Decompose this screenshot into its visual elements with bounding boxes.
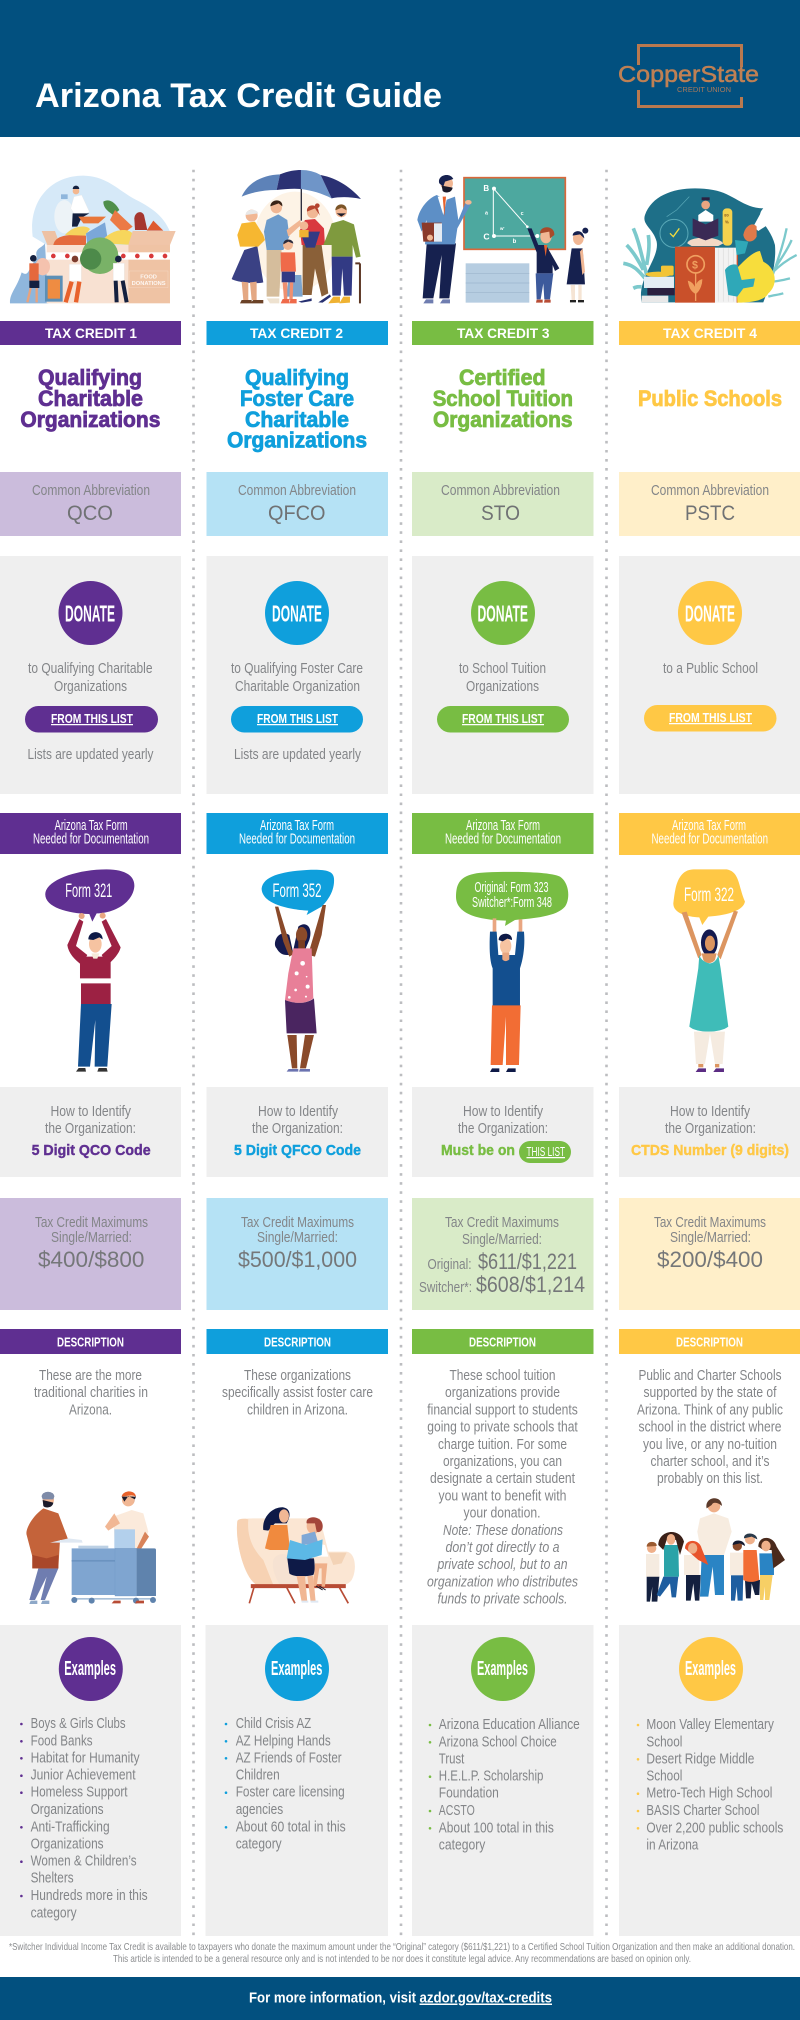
banner: tax form needed: Needed for Documentation [239, 832, 355, 848]
how to identify panel [206, 1087, 388, 1177]
examples list: Desert Ridge Middle [646, 1750, 754, 1767]
examples list: Organizations [31, 1801, 104, 1818]
footer band: azdor.gov/tax-credits [420, 1990, 552, 2006]
banner: tax credit 1 [0, 321, 181, 345]
examples list: About 100 total in this [439, 1819, 554, 1836]
heading: certified school tuition organizations: Certified [459, 365, 546, 390]
donate circle [58, 581, 122, 645]
donate panel: Charitable Organization [235, 678, 360, 695]
person with speech bubble: form 321 [45, 869, 134, 1072]
banner: tax form needed: Arizona Tax Form [466, 818, 540, 834]
donate panel: to Qualifying Foster Care [231, 660, 363, 677]
examples list: Hundreds more in this [31, 1887, 148, 1904]
logo: CopperState Credit Union [618, 46, 759, 106]
how to identify panel: Must be on [441, 1142, 515, 1159]
examples list: agencies [236, 1801, 283, 1818]
heading: qualifying foster care charitable organizations: Foster Care [240, 386, 354, 411]
examples list: H.E.L.P. Scholarship [439, 1768, 543, 1785]
banner: tax form needed [0, 813, 181, 854]
examples list: BASIS Charter School [646, 1802, 759, 1819]
examples list: category [236, 1835, 282, 1852]
illustration: teacher at chalkboard with students: w' [499, 226, 504, 231]
banner: tax form needed: Arizona Tax Form [672, 818, 746, 834]
illustration: teacher at chalkboard with students: C [483, 231, 490, 241]
banner: tax form needed: Arizona Tax Form [260, 818, 334, 834]
donate panel [206, 556, 388, 794]
donate panel: to a Public School [663, 660, 758, 677]
donate circle [471, 581, 535, 645]
how to identify panel [619, 1087, 800, 1177]
common abbreviation box [0, 472, 181, 536]
banner: tax form needed: Arizona Tax Form [55, 818, 128, 834]
banner: tax credit 2: TAX CREDIT 2 [250, 325, 343, 341]
heading: qualifying foster care charitable organizations: Qualifying [245, 365, 349, 390]
examples list: School [646, 1733, 682, 1750]
tax credit maximums box: $611/$1,221 [478, 1249, 577, 1274]
illustration: student on book with piggy bank: 80 [724, 213, 730, 218]
illustration: food donations box [10, 176, 176, 303]
examples list: Food Banks [31, 1732, 93, 1749]
description text: designate a certain student [430, 1470, 576, 1487]
description text: These are the more [39, 1367, 142, 1384]
how to identify panel: 5 Digit QFCO Code [234, 1142, 361, 1159]
how to identify panel: How to Identify [258, 1103, 338, 1120]
tax credit maximums box: Tax Credit Maximums [445, 1214, 559, 1231]
common abbreviation box: Common Abbreviation [441, 482, 560, 499]
illustration: student on book with piggy bank: % [725, 219, 729, 224]
banner: tax form needed: Needed for Documentation [445, 832, 561, 848]
heading: qualifying foster care charitable organizations [227, 365, 367, 452]
common abbreviation box: Common Abbreviation [651, 482, 769, 499]
description text: organizations, you can [443, 1453, 562, 1470]
donate circle: DONATE [478, 600, 528, 626]
description text: charge tuition. For some [438, 1436, 567, 1453]
pill button: from this list: FROM THIS LIST [51, 712, 133, 726]
person with speech bubble: form 352: Form 352 [272, 881, 322, 902]
examples list [429, 1716, 580, 1853]
person with speech bubble: form 322 [673, 869, 745, 1072]
description text: organizations provide [445, 1384, 560, 1401]
pill button: from this list: FROM THIS LIST [462, 712, 544, 726]
description text [34, 1367, 148, 1418]
examples list: About 60 total in this [236, 1818, 346, 1835]
banner: tax credit 3: TAX CREDIT 3 [457, 325, 550, 341]
panel: column 2 qualifying foster care charitable organizations [206, 170, 388, 1936]
person with speech bubble: form 323 and 348: Original: Form 323 [474, 880, 548, 896]
donate panel: Lists are updated yearly [28, 746, 154, 763]
banner: tax form needed [619, 813, 800, 855]
tax credit maximums box: Single/Married: [670, 1229, 751, 1246]
pill button: from this list [437, 706, 569, 732]
examples list: Organizations [31, 1835, 104, 1852]
description text [637, 1367, 783, 1487]
tax credit maximums box: $500/$1,000 [238, 1247, 357, 1272]
examples list: category [439, 1836, 486, 1853]
common abbreviation box [206, 472, 388, 536]
heading: qualifying foster care charitable organizations: Organizations [227, 428, 367, 452]
examples list: ACSTO [439, 1802, 475, 1819]
banner: tax credit 1: TAX CREDIT 1 [45, 325, 137, 341]
illustration: teacher at chalkboard with students: a [485, 210, 488, 216]
heading: qualifying charitable organizations [20, 365, 160, 432]
how to identify panel: the Organization: [458, 1120, 548, 1137]
illustration: teacher at chalkboard with students: b [513, 239, 517, 245]
banner: tax credit 4 [619, 321, 800, 345]
tax credit maximums box: $200/$400 [657, 1247, 763, 1272]
examples circle [471, 1637, 535, 1701]
pill: this list [519, 1141, 571, 1163]
description text: financial support to students [427, 1401, 578, 1418]
person with speech bubble: form 321: Form 321 [65, 881, 112, 902]
banner: description: DESCRIPTION [469, 1334, 536, 1350]
tax credit maximums box [0, 1198, 181, 1310]
illustration: woman reading to child in armchair [237, 1507, 355, 1603]
banner: tax credit 3 [412, 321, 594, 345]
donate circle: DONATE [685, 600, 735, 626]
examples list: Trust [439, 1750, 465, 1767]
how to identify panel: How to Identify [463, 1103, 543, 1120]
common abbreviation box: QFCO [268, 502, 326, 525]
illustration: meal server and man [26, 1491, 156, 1604]
how to identify panel: How to Identify [670, 1103, 750, 1120]
pill button: from this list: FROM THIS LIST [257, 712, 338, 726]
how to identify panel: CTDS Number (9 digits) [631, 1142, 789, 1159]
examples list [20, 1715, 148, 1922]
common abbreviation box [412, 472, 594, 536]
illustration: teacher at chalkboard with students [417, 175, 588, 303]
panel: column 4 public schools [619, 188, 800, 1936]
donate panel [0, 556, 181, 794]
banner: tax form needed: Needed for Documentation [33, 832, 149, 848]
illustration: food donations box: DONATIONS [132, 281, 166, 287]
examples list: Arizona Education Alliance [439, 1716, 580, 1733]
illustration: teacher at chalkboard with students: B [483, 184, 489, 193]
common abbreviation box [619, 472, 800, 536]
panel: column 1 qualifying charitable organizations [0, 176, 181, 1936]
examples list [637, 1716, 783, 1853]
pill button: from this list: FROM THIS LIST [669, 711, 752, 725]
description text: charter school, and it’s [650, 1453, 770, 1470]
common abbreviation box: QCO [67, 502, 113, 525]
examples list: in Arizona [646, 1836, 699, 1853]
examples list: Shelters [31, 1870, 74, 1887]
tax credit maximums box: Single/Married: [462, 1231, 542, 1248]
heading: qualifying charitable organizations: Organizations [20, 407, 160, 432]
banner: tax credit 2 [206, 321, 388, 345]
tax credit maximums box: Single/Married: [257, 1229, 338, 1246]
donate panel [619, 556, 800, 794]
description text [427, 1367, 578, 1608]
illustration: teacher at chalkboard with students: c [521, 211, 524, 217]
description text: Note: These donations [443, 1522, 563, 1539]
heading: qualifying charitable organizations: Charitable [38, 386, 143, 411]
description text: don’t got directly to a [446, 1539, 560, 1556]
examples list: Women & Children’s [31, 1853, 137, 1870]
description text: traditional charities in [34, 1384, 148, 1401]
description text: funds to private schools. [438, 1591, 568, 1608]
description text: probably on this list. [657, 1470, 763, 1487]
examples list: Boys & Girls Clubs [31, 1715, 126, 1732]
heading: public schools: Public Schools [638, 386, 782, 411]
examples panel [619, 1625, 800, 1936]
header band [0, 0, 800, 137]
tax credit maximums box: Tax Credit Maximums [35, 1214, 148, 1231]
donate circle: DONATE [272, 600, 322, 626]
how to identify panel: 5 Digit QCO Code [32, 1142, 151, 1159]
banner: description: DESCRIPTION [57, 1334, 124, 1350]
person with speech bubble: form 352 [262, 870, 334, 1072]
examples list: AZ Helping Hands [236, 1732, 331, 1749]
donate panel: to School Tuition [459, 660, 546, 677]
examples panel [206, 1625, 388, 1936]
examples circle: Examples [271, 1658, 322, 1680]
banner: description [619, 1329, 800, 1354]
heading: certified school tuition organizations: Organizations [433, 407, 572, 432]
examples panel [0, 1625, 181, 1936]
banner: description [412, 1329, 594, 1354]
banner: description: DESCRIPTION [264, 1334, 331, 1350]
tax credit maximums box: Switcher*: [419, 1279, 472, 1296]
donate panel [412, 556, 594, 794]
tax credit maximums box: Tax Credit Maximums [241, 1214, 354, 1231]
examples list: Habitat for Humanity [31, 1749, 140, 1766]
donate circle [265, 581, 329, 645]
description text: Arizona. [69, 1401, 112, 1418]
how to identify panel: the Organization: [45, 1120, 136, 1137]
how to identify panel [412, 1087, 594, 1177]
illustration: student on book with piggy bank: $ [692, 259, 698, 271]
donate panel: Lists are updated yearly [234, 746, 361, 763]
description text: These school tuition [450, 1367, 556, 1384]
pill button: from this list [644, 705, 776, 732]
common abbreviation box: PSTC [685, 502, 735, 525]
heading: certified school tuition organizations: School Tuition [433, 386, 573, 411]
logo: CopperState Credit Union: CREDIT UNION [677, 85, 731, 94]
person with speech bubble: form 323 and 348: Switcher*:Form 348 [472, 895, 552, 911]
examples panel [412, 1625, 594, 1936]
pill button: from this list [25, 706, 158, 732]
description text: you want to benefit with [438, 1487, 566, 1504]
illustration: family under umbrella [232, 170, 361, 303]
donate circle [678, 581, 742, 645]
description text: children in Arizona. [247, 1401, 348, 1418]
description text: specifically assist foster care [222, 1384, 373, 1401]
how to identify panel: How to Identify [50, 1103, 131, 1120]
heading: qualifying charitable organizations: Qualifying [38, 365, 142, 390]
tax credit maximums box: Original: [428, 1256, 472, 1273]
examples list: Foster care licensing [236, 1784, 345, 1801]
illustration: student on book with piggy bank [623, 188, 797, 303]
person with speech bubble: form 323 and 348 [456, 872, 568, 1072]
examples list: Homeless Support [31, 1784, 128, 1801]
banner: description [206, 1329, 388, 1354]
banner: tax form needed [412, 813, 594, 854]
tax credit maximums box: Single/Married: [51, 1229, 132, 1246]
illustration: teacher with children [646, 1498, 785, 1602]
banner: tax form needed [206, 813, 388, 854]
description text: your donation. [464, 1505, 540, 1522]
title: Arizona Tax Credit Guide [35, 77, 442, 115]
tax credit maximums box [619, 1198, 800, 1310]
description text: organization who distributes [427, 1573, 578, 1590]
person with speech bubble: form 322: Form 322 [684, 885, 734, 906]
examples list: category [31, 1905, 77, 1922]
banner: description [0, 1329, 181, 1354]
examples list: School [646, 1768, 682, 1785]
common abbreviation box: Common Abbreviation [32, 482, 150, 499]
description text [222, 1367, 373, 1418]
how to identify panel [0, 1087, 181, 1177]
donate panel: Organizations [54, 678, 127, 695]
banner: description: DESCRIPTION [676, 1334, 743, 1350]
examples circle [679, 1637, 743, 1701]
tax credit maximums box: $400/$800 [38, 1247, 144, 1272]
footer band: For more information, visit [249, 1990, 416, 2006]
illustration: food donations box: FOOD [140, 274, 157, 280]
tax credit maximums box [206, 1198, 388, 1310]
donate panel: Organizations [466, 678, 539, 695]
description text: going to private schools that [427, 1419, 578, 1436]
donate circle: DONATE [65, 600, 115, 626]
examples list: Child Crisis AZ [236, 1715, 311, 1732]
donate panel: to Qualifying Charitable [28, 660, 152, 677]
common abbreviation box: Common Abbreviation [238, 482, 356, 499]
examples circle: Examples [477, 1658, 528, 1680]
description text: These organizations [244, 1367, 351, 1384]
examples circle: Examples [685, 1658, 736, 1680]
tax credit maximums box [412, 1198, 594, 1310]
pill: this list: THIS LIST [526, 1145, 565, 1159]
logo: CopperState Credit Union: CopperState [618, 61, 759, 87]
footnote [9, 1941, 795, 1965]
common abbreviation box: STO [481, 502, 520, 525]
how to identify panel: the Organization: [252, 1120, 343, 1137]
examples list: Arizona School Choice [439, 1733, 557, 1750]
heading: certified school tuition organizations [433, 365, 573, 432]
pill button: from this list [231, 706, 363, 732]
footer band [0, 1977, 800, 2020]
examples list: Foundation [439, 1785, 499, 1802]
description text: private school, but to an [437, 1556, 568, 1573]
examples circle [59, 1637, 123, 1701]
examples list: Anti-Trafficking [31, 1818, 110, 1835]
banner: tax credit 4: TAX CREDIT 4 [663, 325, 757, 341]
tax credit maximums box: $608/$1,214 [476, 1272, 585, 1297]
tax credit maximums box: Tax Credit Maximums [654, 1214, 766, 1231]
heading: qualifying foster care charitable organizations: Charitable [245, 407, 349, 432]
examples list: AZ Friends of Foster [236, 1749, 342, 1766]
examples list [225, 1715, 346, 1852]
examples circle: Examples [64, 1658, 116, 1680]
panel: column 3 certified school tuition organizations [412, 175, 594, 1936]
examples list: Children [236, 1767, 280, 1784]
how to identify panel: the Organization: [665, 1120, 756, 1137]
examples circle [265, 1637, 329, 1701]
examples list: Junior Achievement [31, 1767, 136, 1784]
